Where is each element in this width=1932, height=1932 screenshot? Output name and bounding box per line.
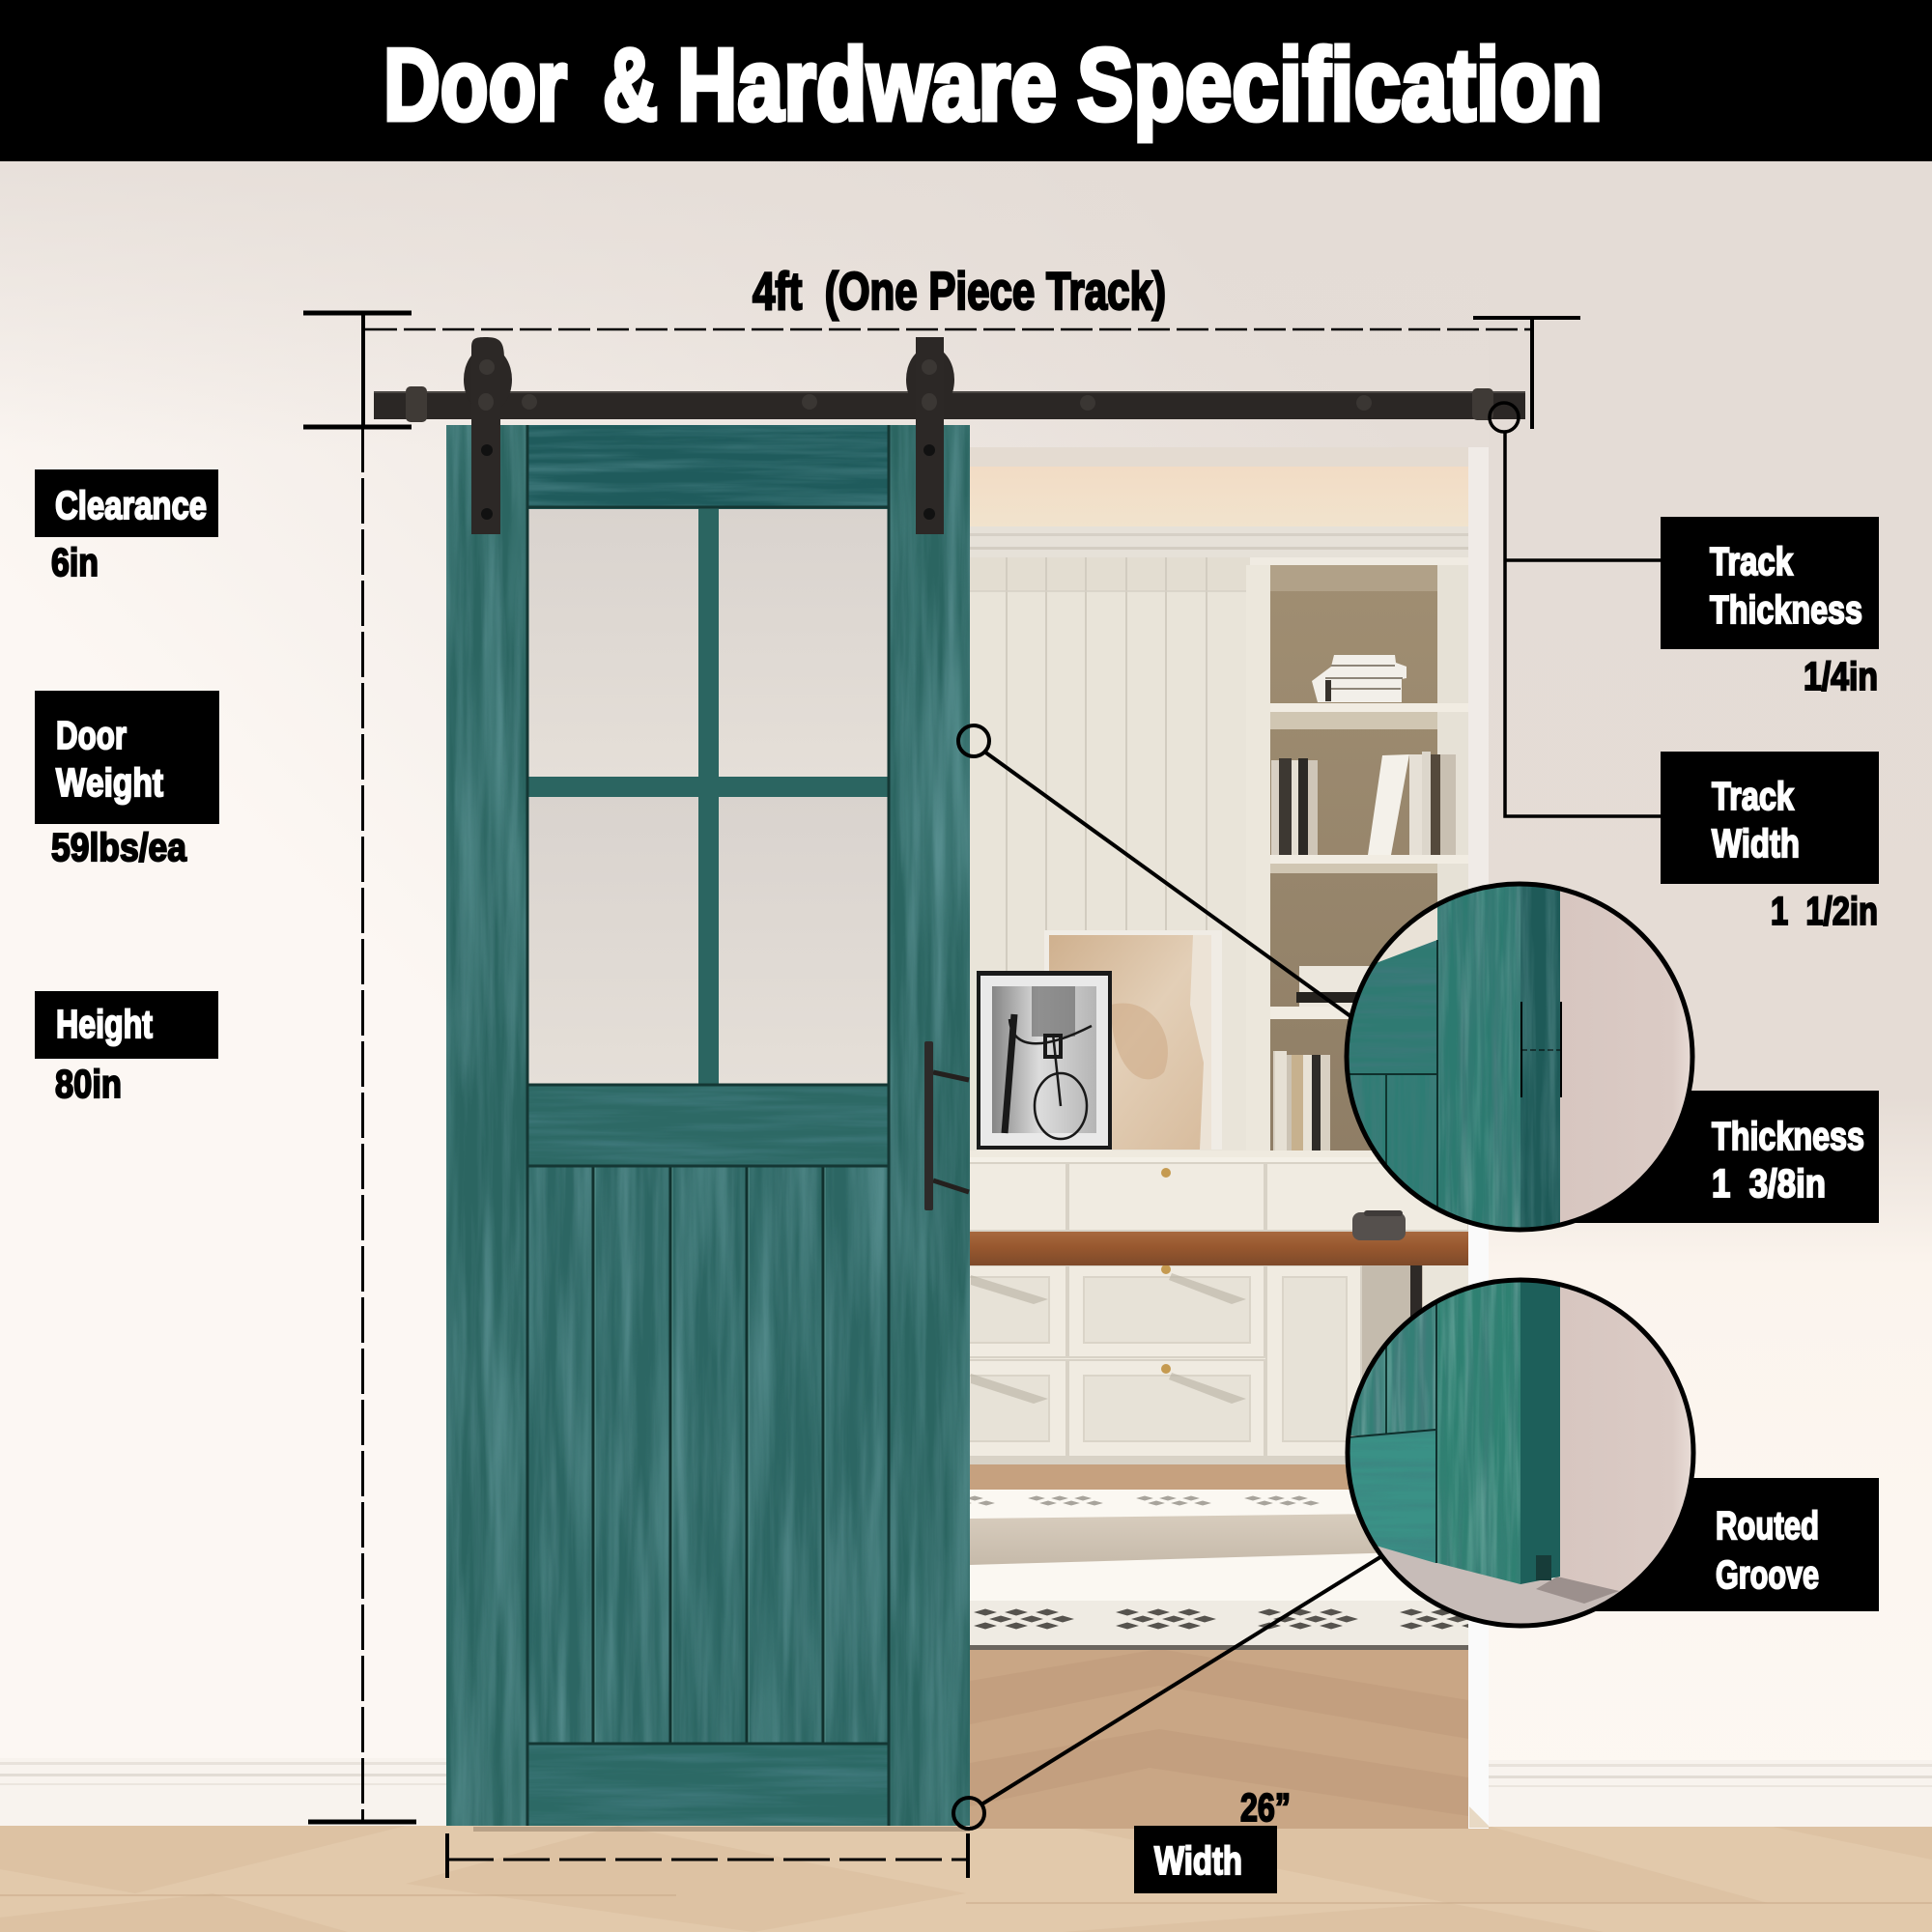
mid rail xyxy=(528,1085,888,1166)
handle xyxy=(924,1041,969,1210)
label: routed groove: Groove xyxy=(1716,1552,1819,1597)
left baseboard xyxy=(0,1758,447,1826)
frame grooves xyxy=(527,425,889,1826)
label: height xyxy=(35,991,218,1059)
bookcase xyxy=(1246,565,1470,1158)
label: door weight: Door xyxy=(56,713,127,757)
wooden desk top xyxy=(970,1232,1470,1265)
glass panes xyxy=(528,509,889,1085)
label: routed groove xyxy=(1546,1478,1879,1611)
right hanger strap and wheel xyxy=(906,337,954,534)
title: Specification xyxy=(1077,28,1603,142)
label: track thickness: Track xyxy=(1710,539,1793,583)
ceiling soffit xyxy=(966,447,1470,467)
label: track width: Track xyxy=(1712,774,1794,818)
label: width: Width xyxy=(1154,1838,1242,1883)
label: height: Height xyxy=(56,1002,153,1046)
title bar xyxy=(0,0,1932,161)
lens planks xyxy=(1350,1075,1436,1206)
lens stile xyxy=(1437,1275,1520,1584)
lens stile xyxy=(1437,879,1520,1236)
lens wall xyxy=(1560,891,1688,1223)
label: track width xyxy=(1661,752,1879,884)
title: Hardware xyxy=(677,28,1057,142)
value: clearance: 6in xyxy=(51,540,99,584)
label: clearance: Clearance xyxy=(55,483,207,527)
room floor and rug xyxy=(970,1464,1470,1829)
title: & xyxy=(603,28,658,142)
label: width xyxy=(1134,1826,1277,1893)
cabinets xyxy=(966,1151,1470,1464)
value: track width: 1 1/2in xyxy=(1771,889,1878,933)
label: clearance xyxy=(35,469,218,537)
label: door weight: Weight xyxy=(56,760,163,805)
left stile grain xyxy=(446,425,527,1826)
floor foreground xyxy=(0,1824,1932,1932)
label: track thickness: Thickness xyxy=(1710,587,1862,632)
lens door edge with routed groove xyxy=(1520,1275,1560,1584)
label: track width: Width xyxy=(1712,821,1800,866)
track length label: 4ft (One Piece Track) xyxy=(753,261,1166,321)
lens door edge xyxy=(1520,879,1560,1236)
door opening trim xyxy=(1468,447,1489,1829)
crown moulding xyxy=(966,526,1470,557)
value: height: 80in xyxy=(55,1062,122,1106)
label: door thickness xyxy=(1546,1091,1879,1223)
value: width: 26” xyxy=(1240,1785,1291,1830)
label: door thickness: Thickness xyxy=(1712,1114,1864,1158)
track callout leader lines xyxy=(1490,403,1661,816)
clearance dimension bracket xyxy=(303,313,412,427)
magnified lens: door thickness detail xyxy=(1343,879,1700,1239)
barn door track xyxy=(374,386,1525,422)
label: routed groove: Routed xyxy=(1716,1503,1819,1548)
room seen through the doorway xyxy=(966,447,1470,1829)
door height dashed dimension line xyxy=(308,427,416,1822)
door edge callout circle and leader xyxy=(958,725,1350,1016)
bottom rail xyxy=(528,1745,888,1826)
label: door thickness: 1 3/8in xyxy=(1712,1161,1826,1206)
knob shadows xyxy=(971,1273,1246,1404)
right stile grain xyxy=(889,425,970,1826)
magnified lens: routed groove detail xyxy=(1343,1275,1700,1642)
label: track thickness xyxy=(1661,517,1879,649)
panelled wall xyxy=(970,557,1250,1166)
lens bottom rail xyxy=(1350,1431,1435,1563)
lens wall xyxy=(1560,1287,1690,1592)
right stopper xyxy=(1472,388,1493,420)
value: track thickness: 1/4in xyxy=(1804,654,1878,698)
track length dashed dimension line xyxy=(365,318,1580,429)
large beige art print xyxy=(1044,930,1222,1150)
left hanger strap and wheel xyxy=(464,337,512,534)
lower planks xyxy=(528,1167,888,1744)
left stopper xyxy=(406,386,427,422)
title xyxy=(384,28,1603,142)
thickness measure marks xyxy=(1521,1002,1561,1097)
top rail xyxy=(528,425,888,507)
books xyxy=(1271,655,1456,1151)
label: door weight xyxy=(35,691,219,824)
lens floor xyxy=(1378,1546,1620,1623)
lens planks xyxy=(1350,1305,1435,1435)
title: Door xyxy=(384,28,567,142)
right baseboard xyxy=(1489,1760,1932,1827)
door bottom callout circle and leader xyxy=(953,1555,1383,1829)
lens rail xyxy=(1343,940,1437,1073)
sliding barn door xyxy=(446,425,970,1826)
mug xyxy=(1352,1210,1406,1240)
door width dashed dimension line xyxy=(447,1833,968,1878)
value: door weight: 59lbs/ea xyxy=(51,825,187,869)
black and white bicycle photo xyxy=(977,971,1112,1150)
warm ceiling glow xyxy=(966,467,1470,526)
